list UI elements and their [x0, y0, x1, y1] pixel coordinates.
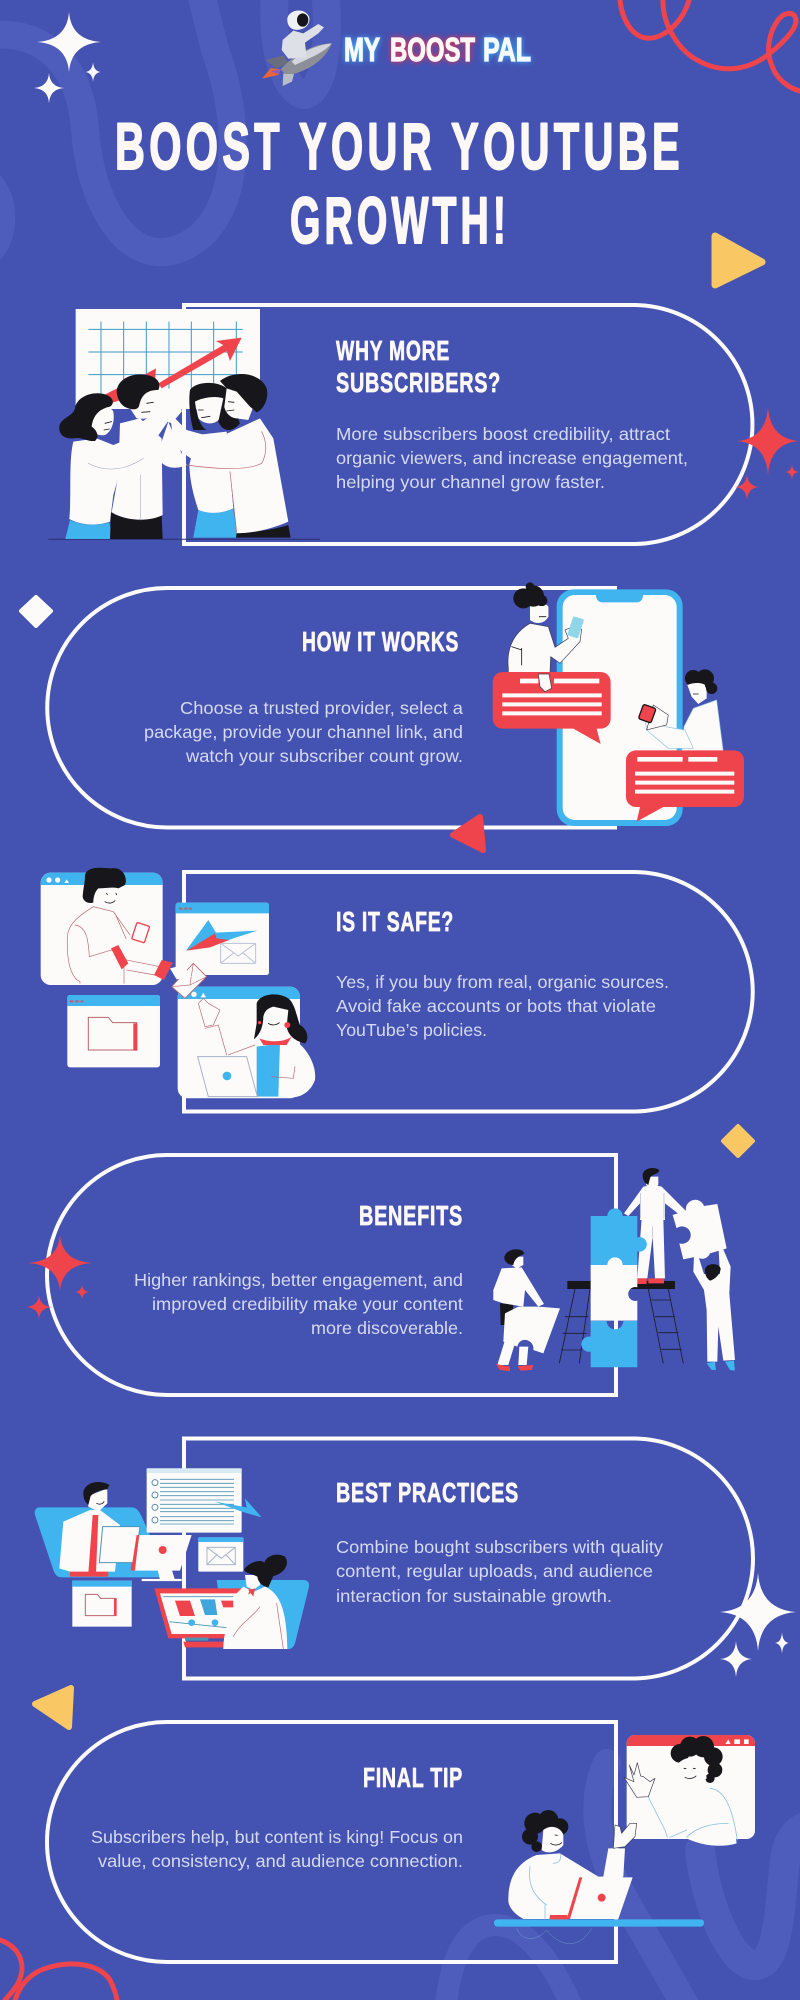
red squiggle top right: [620, 0, 800, 91]
panel: benefits: [47, 1155, 735, 1395]
body text: Avoid fake accounts or bots that violate: [336, 996, 656, 1016]
icon: yellow diamond: [723, 1126, 753, 1156]
heading: [336, 335, 501, 398]
checklist window: [147, 1468, 242, 1533]
body text: value, consistency, and audience connection.: [98, 1851, 463, 1871]
panel outline: [184, 872, 753, 1112]
panel: is it safe: [41, 868, 753, 1112]
raised hands: [158, 386, 182, 423]
blue seat right: [217, 1580, 309, 1649]
white sparkles top left: [34, 12, 101, 103]
body text: Yes, if you buy from real, organic sources.: [336, 972, 669, 992]
body text: Choose a trusted provider, select a: [180, 698, 463, 718]
man with document: [59, 1482, 140, 1577]
body text: package, provide your channel link, and: [144, 722, 463, 742]
person at laptop: [508, 1810, 637, 1920]
man on platform: [624, 1168, 687, 1284]
white sparkles right of panel five: [720, 1573, 796, 1677]
body text: YouTube’s policies.: [336, 1020, 487, 1040]
panel outline: [47, 1155, 616, 1395]
body text: improved credibility make your content: [152, 1294, 463, 1314]
panel: final tip: [47, 1722, 755, 1962]
body text: Subscribers help, but content is king! Focus on: [91, 1827, 463, 1847]
panel outline: [47, 588, 617, 828]
body text: [336, 424, 688, 492]
video call window: [627, 1735, 755, 1839]
body text: helping your channel grow faster.: [336, 472, 605, 492]
body text: organic viewers, and increase engagement,: [336, 448, 688, 468]
illustration: online workspace: [35, 1468, 309, 1649]
title: GROWTH!: [290, 183, 510, 257]
heading: BENEFITS: [359, 1200, 463, 1231]
icon: white diamond: [21, 597, 51, 626]
person 3: [189, 383, 240, 538]
phone: [557, 589, 683, 826]
panel outline: [184, 1438, 753, 1678]
icon: yellow triangle left: [35, 1688, 71, 1727]
heading: WHY MORE: [336, 335, 450, 366]
ladder platform: [559, 1281, 683, 1363]
monitor: [131, 1535, 192, 1580]
illustration: video call: [494, 1735, 755, 1944]
body text: content, regular uploads, and audience: [336, 1561, 653, 1581]
person 4: [158, 374, 291, 538]
envelope window: [198, 1537, 243, 1572]
heading: BEST PRACTICES: [336, 1477, 519, 1508]
illustration: team solving puzzle: [493, 1168, 735, 1371]
body text: [91, 1827, 463, 1871]
window: paper plane: [176, 903, 269, 975]
heading: IS IT SAFE?: [336, 906, 454, 937]
panel outline: [184, 305, 752, 544]
panel: why more subscribers: [48, 305, 752, 544]
body text: [336, 1537, 663, 1606]
logo text: MY: MY: [344, 31, 380, 68]
panel: how it works: [47, 582, 744, 828]
red squiggle bottom left: [0, 1940, 117, 2000]
icon: yellow triangle top right: [715, 236, 762, 285]
woman with phone: [508, 582, 584, 673]
window: man with phone: [41, 868, 173, 985]
person on screen: [624, 1736, 737, 1846]
body text: interaction for sustainable growth.: [336, 1586, 612, 1606]
folder window: [72, 1581, 132, 1627]
chat bubble right: [626, 750, 744, 822]
man with phone: [638, 669, 723, 752]
icon: astronaut on rocket: [262, 10, 332, 86]
panel: best practices: [35, 1438, 753, 1678]
person 1: [59, 393, 145, 539]
red sparkles left of panel four: [26, 1235, 92, 1319]
woman thinking: [223, 1555, 287, 1649]
heading: HOW IT WORKS: [302, 626, 459, 657]
body text: [134, 1270, 463, 1338]
puzzle pieces stack: [581, 1208, 647, 1367]
illustration: browser windows and people: [41, 868, 315, 1098]
logo: [262, 10, 531, 86]
body text: more discoverable.: [311, 1318, 463, 1338]
ground line: [48, 538, 320, 541]
paper plane: [215, 1498, 262, 1517]
desk: [494, 1919, 704, 1927]
red sparkles right of panel one: [735, 407, 799, 500]
body text: More subscribers boost credibility, attract: [336, 424, 670, 444]
woman with puzzle: [493, 1249, 560, 1371]
blue seat left: [35, 1507, 167, 1577]
window: woman at laptop: [178, 987, 315, 1098]
growth chart: [76, 309, 260, 409]
title: [115, 109, 684, 257]
large screen: [154, 1588, 255, 1647]
body text: [144, 698, 463, 766]
person 2: [88, 374, 170, 539]
icon: red triangle: [453, 817, 483, 850]
logo text: BOOST: BOOST: [390, 31, 475, 68]
illustration: team high five with growth chart: [48, 309, 320, 539]
chat bubble left: [493, 672, 611, 744]
loose puzzle piece right: [673, 1200, 727, 1259]
body text: [336, 972, 669, 1040]
body text: Higher rankings, better engagement, and: [134, 1270, 463, 1290]
heading: FINAL TIP: [363, 1762, 463, 1793]
window: folder: [67, 995, 160, 1067]
illustration: phone and chat bubbles: [493, 582, 744, 826]
body text: Combine bought subscribers with quality: [336, 1537, 663, 1557]
body text: watch your subscriber count grow.: [185, 746, 463, 766]
person lifting puzzle: [693, 1249, 735, 1371]
heading: SUBSCRIBERS?: [336, 367, 501, 398]
panel outline: [47, 1722, 616, 1962]
envelope and hand: [170, 963, 207, 998]
logo text: PAL: PAL: [483, 31, 531, 68]
